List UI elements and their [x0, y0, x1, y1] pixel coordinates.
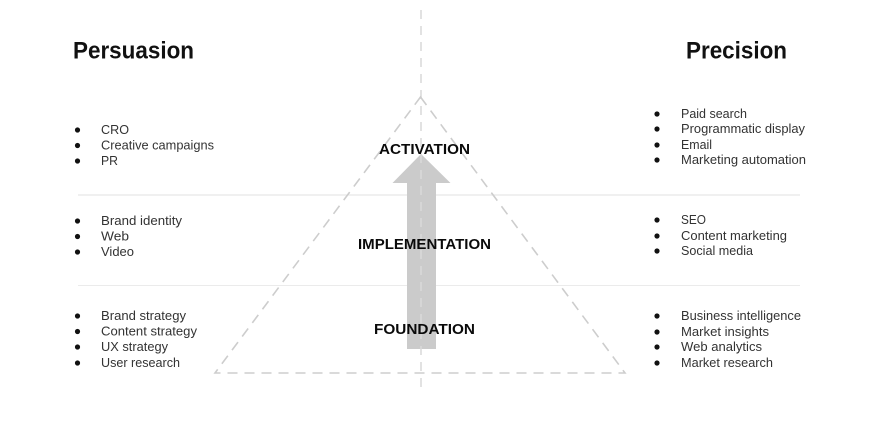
layer label: Implementation: IMPLEMENTATION: [358, 237, 491, 253]
list: Precision foundation: [654, 309, 801, 370]
list: Precision activation: Programmatic display: [681, 122, 806, 136]
list: Persuasion activation: PR: [101, 154, 118, 168]
arrow: upward progression: [392, 154, 450, 349]
list: Precision activation: Paid search: [681, 107, 747, 121]
dashed vertical axis: [420, 10, 422, 392]
list: Precision implementation: [654, 213, 787, 258]
list: Persuasion activation: CRO: [101, 123, 129, 137]
heading: Persuasion: Persuasion: [73, 38, 194, 64]
list: Persuasion implementation: Brand identity: [101, 214, 183, 228]
list: Persuasion foundation: UX strategy: [101, 340, 169, 354]
list: Precision foundation: Market insights: [681, 325, 769, 339]
list: Precision implementation: Content marketing: [681, 229, 787, 243]
heading: Precision: Precision: [686, 38, 787, 64]
list: Persuasion activation: [75, 123, 214, 168]
list: Persuasion foundation: Content strategy: [101, 324, 198, 338]
dashed pyramid outline: [215, 97, 625, 373]
list: Persuasion implementation: Web: [101, 230, 129, 244]
list: Precision activation: Email: [681, 138, 712, 152]
list: Precision foundation: Web analytics: [681, 340, 762, 354]
list: Persuasion foundation: [75, 309, 198, 370]
list: Precision activation: [654, 107, 806, 167]
layer label: Activation: ACTIVATION: [379, 142, 470, 158]
list: Persuasion implementation: Video: [101, 245, 134, 259]
list: Persuasion activation: Creative campaigns: [101, 138, 214, 152]
list: Precision implementation: SEO: [681, 213, 706, 227]
list: Persuasion implementation: [75, 214, 183, 259]
list: Precision foundation: Business intelligence: [681, 309, 801, 323]
list: Precision activation: Marketing automation: [681, 153, 806, 167]
list: Persuasion foundation: User research: [101, 356, 180, 370]
layer label: Foundation: FOUNDATION: [374, 322, 475, 338]
list: Precision foundation: Market research: [681, 356, 773, 370]
list: Persuasion foundation: Brand strategy: [101, 309, 187, 323]
list: Precision implementation: Social media: [681, 244, 753, 258]
